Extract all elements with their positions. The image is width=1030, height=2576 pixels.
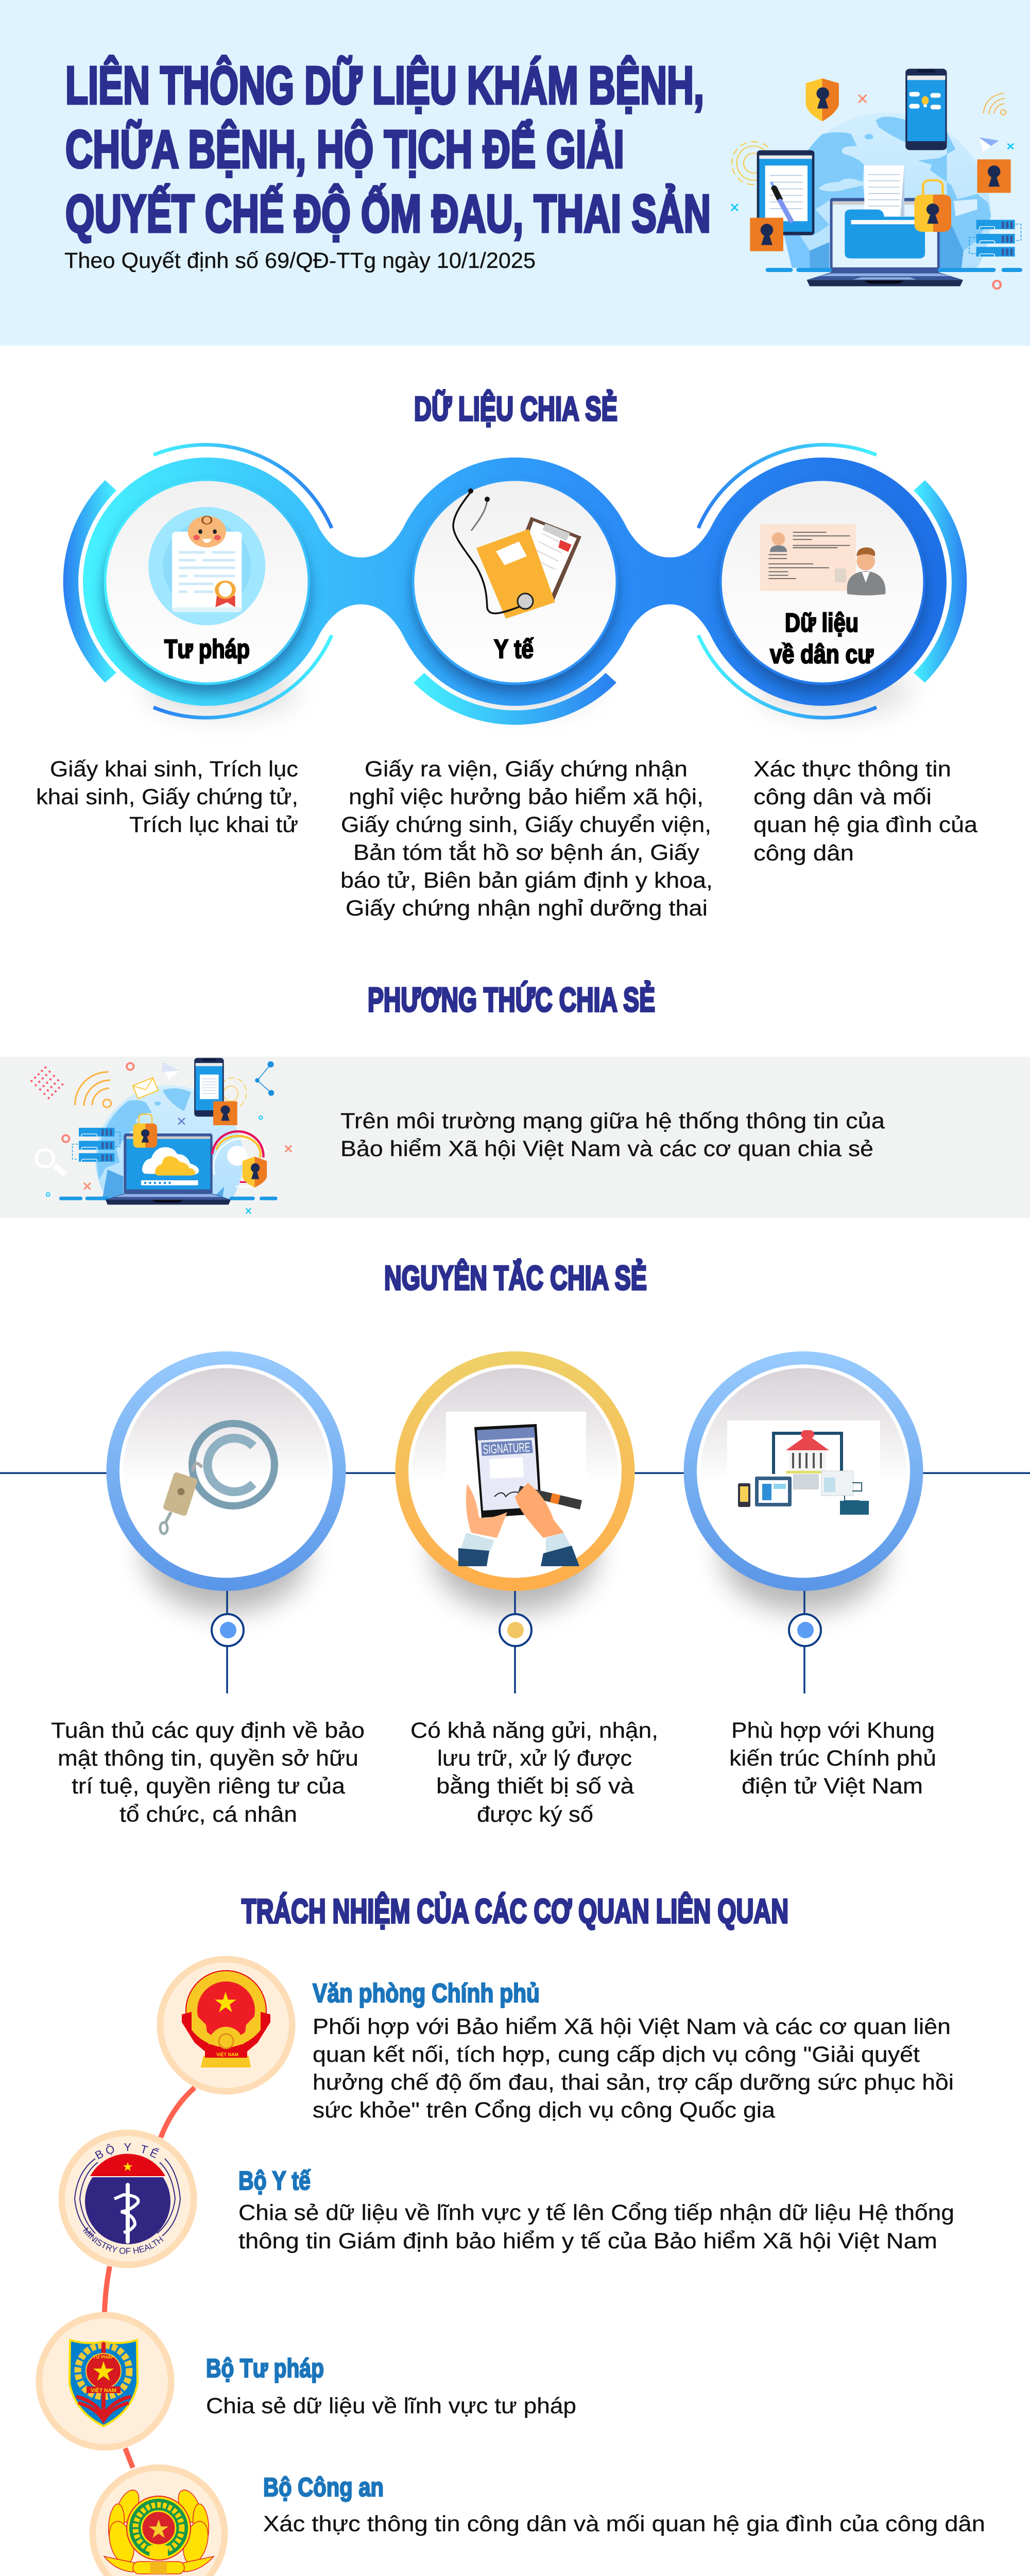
- text block: health data: Giấy chứng sinh, Giấy chuyển viện,: [341, 812, 711, 837]
- text block: justice data: Trích lục khai tử: [129, 812, 298, 837]
- org text: government office: quan kết nối, tích hợp, cung cấp dịch vụ công "Giải quyết: [313, 2042, 920, 2067]
- org text: ministry of public security: [263, 2472, 985, 2536]
- connector line: [105, 2088, 246, 2576]
- decoration: dots, wifi, rings, plane: [31, 1061, 291, 1213]
- text block: health data: nghỉ việc hưởng bảo hiểm xã hội,: [349, 785, 703, 809]
- stems: [227, 1591, 804, 1693]
- org text: ministry of health: Bộ Y tế: [238, 2166, 311, 2195]
- text block: principle 2: được ký số: [477, 1802, 593, 1827]
- text block: principle 1: trí tuệ, quyền riêng tư của: [72, 1774, 345, 1799]
- shadows: [144, 1494, 886, 1613]
- text block: citizen data: quan hệ gia đình của: [753, 812, 977, 837]
- icon: national emblem: VIỆT NAM: [216, 2052, 238, 2057]
- circle: digital signature: [396, 1351, 634, 1591]
- org circle: ministry of justice: [36, 2312, 174, 2450]
- text block: principle 1: tổ chức, cá nhân: [119, 1802, 297, 1827]
- heading: sharing method: PHƯƠNG THỨC CHIA SẺ: [368, 980, 655, 1019]
- text block: health data: báo tử, Biên bản giám định y khoa,: [340, 868, 713, 893]
- icon: ministry of health emblem: BỘ Y TẾ: [95, 2143, 160, 2159]
- icon: servers: [73, 1128, 120, 1162]
- text: sharing method description: Trên môi trường mạng giữa hệ thống thông tin của: [340, 1109, 885, 1133]
- subtitle: Theo Quyết định số 69/QĐ-TTg ngày 10/1/2025: [64, 248, 536, 273]
- org circle: ministry of public security: [90, 2465, 228, 2576]
- icon: circular arcs with shield: [212, 1131, 267, 1188]
- icon: gear and phone: [194, 1058, 247, 1125]
- node dots: [220, 1622, 814, 1638]
- shadows under rings: [144, 659, 912, 716]
- text block: citizen data: công dân và mối: [753, 785, 932, 809]
- icon: padlock: [133, 1114, 157, 1148]
- text block: principle 3: Phù hợp với Khung: [731, 1718, 935, 1743]
- icon: copyright lock: [160, 1423, 274, 1534]
- circle: e-government architecture: [684, 1351, 923, 1591]
- title: [65, 55, 711, 243]
- title: LIÊN THÔNG DỮ LIỆU KHÁM BỆNH,: [65, 55, 704, 115]
- inner shadow shading: [104, 488, 925, 694]
- text block: principle 3: điện tử Việt Nam: [742, 1774, 923, 1799]
- icon: orange locks: [750, 159, 1011, 251]
- icon: ministry of health emblem: [74, 2143, 181, 2255]
- org text: ministry of justice: Bộ Tư pháp: [206, 2353, 324, 2383]
- icon: justice shield: VIỆT NAM: [91, 2387, 116, 2394]
- text block: principle 1: [51, 1718, 365, 1827]
- text block: principle 2: [410, 1718, 658, 1827]
- icon: national emblem: [182, 1971, 270, 2067]
- label: health: Y tế: [494, 634, 534, 664]
- panel: principles: [0, 1351, 1030, 1693]
- icon: shield: [806, 78, 839, 122]
- org text: government office: sức khỏe" trên Cổng dịch vụ công Quốc gia: [313, 2098, 775, 2123]
- label: citizen data: [770, 608, 873, 669]
- icon: ministry of health emblem: MINISTRY OF HEALTH: [82, 2227, 164, 2255]
- org text: government office: hưởng chế độ ốm đau, thai sản, trợ cấp dưỡng sức phục hồi: [313, 2070, 954, 2095]
- text block: principle 2: bằng thiết bị số và: [436, 1774, 634, 1799]
- org text: ministry of public security: Xác thực thông tin công dân và mối quan hệ gia đình của công dân: [263, 2512, 985, 2536]
- text block: principle 3: kiến trúc Chính phủ: [729, 1746, 936, 1771]
- org text: government office: Phối hợp với Bảo hiểm Xã hội Việt Nam và các cơ quan liên: [313, 2014, 951, 2039]
- org text: government office: [313, 1978, 954, 2123]
- text block: health data: Bản tóm tắt hồ sơ bệnh án, Giấy: [353, 840, 700, 865]
- icon: birth certificate: [148, 507, 265, 625]
- text block: citizen data: công dân: [753, 841, 854, 866]
- icon: phone: [905, 69, 947, 150]
- panel: sharing method band: [0, 1057, 1030, 1233]
- title: QUYẾT CHẾ ĐỘ ỐM ĐAU, THAI SẢN: [65, 184, 711, 243]
- icon: laptop with cloud: [59, 1133, 278, 1205]
- text block: health data: [340, 757, 713, 921]
- label: justice: Tư pháp: [164, 634, 250, 664]
- inner discs: [105, 480, 924, 684]
- org text: government office: Văn phòng Chính phủ: [313, 1978, 540, 2008]
- node markers: [212, 1614, 821, 1646]
- icon: justice shield: TƯ PHÁP: [93, 2354, 114, 2360]
- thin outer arcs: [153, 445, 877, 718]
- icon: tablet signing: SIGNATURE: [483, 1440, 530, 1457]
- text block: citizen data: [753, 757, 977, 866]
- icon: citizen record: [760, 524, 886, 596]
- text: sharing method description: [340, 1109, 885, 1161]
- org circle: ministry of health: [59, 2130, 197, 2268]
- text block: principle 2: Có khả năng gửi, nhận,: [410, 1718, 658, 1743]
- icon: medical folder and stethoscope: [453, 488, 581, 619]
- text block: health data: Giấy chứng nhận nghỉ dưỡng thai: [346, 896, 708, 921]
- heading: data shared: DỮ LIỆU CHIA SẺ: [414, 389, 617, 428]
- text block: justice data: khai sinh, Giấy chứng tử,: [36, 785, 298, 809]
- icon: public security emblem: [104, 2487, 214, 2574]
- icon: government building on devices: [738, 1430, 869, 1515]
- text block: justice data: Giấy khai sinh, Trích lục: [50, 757, 298, 782]
- icon: gear outline: [732, 142, 775, 184]
- text block: principle 1: mật thông tin, quyền sở hữu: [58, 1746, 358, 1771]
- text block: health data: Giấy ra viện, Giấy chứng nhận: [365, 757, 688, 782]
- heading: responsibilities: TRÁCH NHIỆM CỦA CÁC CƠ QUAN LIÊN QUAN: [242, 1892, 788, 1930]
- org text: ministry of health: Chia sẻ dữ liệu về lĩnh vực y tế lên Cổng tiếp nhận dữ liệu Hệ thống: [238, 2200, 954, 2225]
- icon: tablet signing: [458, 1424, 582, 1566]
- text: sharing method description: Bảo hiểm Xã hội Việt Nam và các cơ quan chia sẻ: [340, 1137, 873, 1161]
- text block: citizen data: Xác thực thông tin: [753, 757, 951, 782]
- text block: justice data: [36, 757, 298, 837]
- org text: ministry of justice: Chia sẻ dữ liệu về lĩnh vực tư pháp: [206, 2394, 576, 2418]
- org text: ministry of public security: Bộ Công an: [263, 2472, 384, 2502]
- icon: servers: [969, 220, 1021, 257]
- crescents: [63, 480, 116, 683]
- icon: network illustration: [30, 1058, 293, 1214]
- icon: laptop with folder: [765, 165, 1022, 286]
- icon: header illustration globe, devices and locks: [730, 69, 1023, 290]
- heading: sharing principles: NGUYÊN TẮC CHIA SẺ: [384, 1259, 647, 1297]
- text block: principle 2: lưu trữ, xử lý được: [437, 1746, 632, 1771]
- text block: principle 1: Tuân thủ các quy định về bảo: [51, 1718, 365, 1743]
- text block: principle 3: [729, 1718, 936, 1799]
- icon: justice shield: [70, 2340, 138, 2426]
- circle: copyright: [106, 1351, 346, 1591]
- label: citizen data: Dữ liệu: [785, 608, 859, 637]
- org text: ministry of health: [238, 2166, 954, 2253]
- title: CHỮA BỆNH, HỘ TỊCH ĐỂ GIẢI: [65, 119, 624, 179]
- icon: small decorations: [731, 93, 1014, 289]
- label: citizen data: về dân cư: [770, 639, 873, 669]
- org circle: government office: [157, 1956, 296, 2095]
- header panel: [0, 0, 1030, 346]
- panel: three data rings: [63, 445, 967, 725]
- icon: tablet with document: [757, 150, 814, 235]
- org text: ministry of health: thông tin Giám định bảo hiểm y tế của Bảo hiểm Xã hội Việt Nam: [238, 2229, 937, 2253]
- ring bodies and connectors: [83, 457, 947, 706]
- org text: ministry of justice: [206, 2353, 576, 2418]
